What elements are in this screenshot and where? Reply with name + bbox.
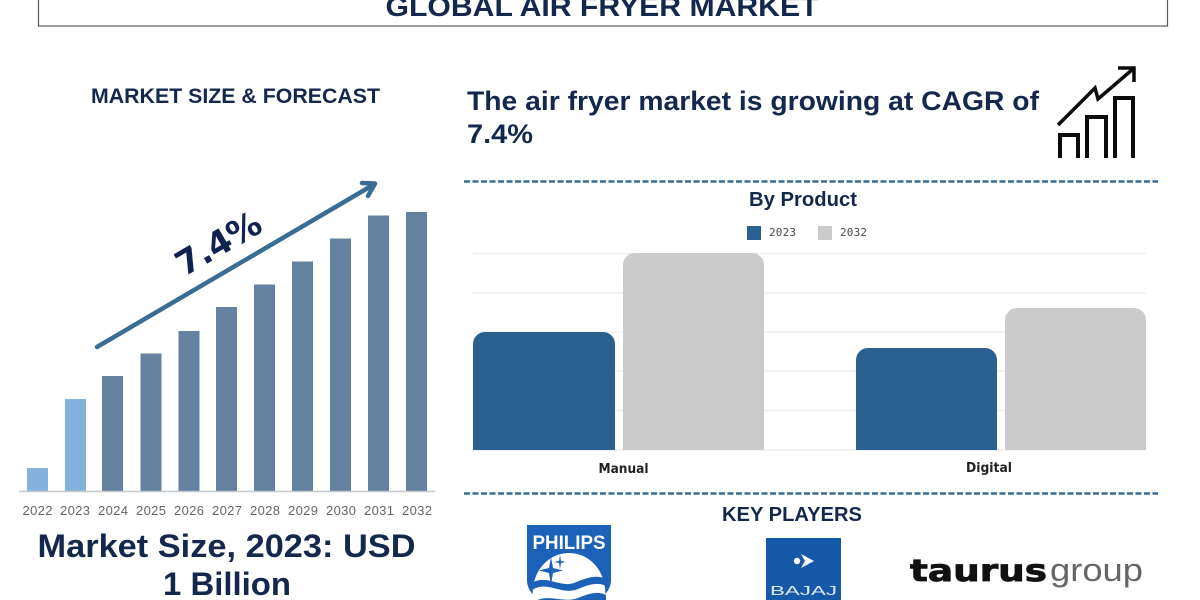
heading: key players: KEY PLAYERS <box>722 504 862 526</box>
header banner <box>38 0 1168 26</box>
bar chart: market forecast 2022-2032 <box>19 212 435 518</box>
divider: upper <box>464 180 1158 183</box>
growth arrow <box>97 183 375 347</box>
market size callout: Market Size, 2023: USD <box>38 528 416 564</box>
icon: growth chart <box>1058 68 1134 158</box>
year labels: 2026 <box>174 503 204 518</box>
heading: market size and forecast: MARKET SIZE & FORECAST <box>91 85 380 108</box>
year labels: 2032 <box>402 503 432 518</box>
logo: Bajaj: BAJAJ <box>770 583 837 598</box>
category labels: Digital <box>966 461 1012 476</box>
growth rate label: 7.4% <box>168 204 269 285</box>
logo: Philips: PHILIPS <box>532 533 606 554</box>
year labels: 2029 <box>288 503 318 518</box>
logo: Bajaj <box>766 538 841 600</box>
market size callout <box>38 528 416 600</box>
year labels: 2022 <box>22 503 52 518</box>
year labels: 2030 <box>326 503 356 518</box>
CAGR statement <box>467 86 1040 149</box>
year labels: 2027 <box>212 503 242 518</box>
legend: 2023 <box>769 226 796 239</box>
legend: 2032 <box>840 226 867 239</box>
CAGR statement: 7.4% <box>467 119 533 149</box>
year labels: 2024 <box>98 503 128 518</box>
year labels: 2028 <box>250 503 280 518</box>
category labels: Manual <box>598 462 648 477</box>
CAGR statement: The air fryer market is growing at CAGR of <box>467 86 1040 116</box>
legend <box>747 226 867 240</box>
logo: Taurus group: group <box>1050 552 1143 588</box>
heading: by product: By Product <box>749 189 857 211</box>
logo: Taurus group: taurus <box>910 554 1047 589</box>
logo: Philips <box>527 525 611 600</box>
year labels: 2031 <box>364 503 394 518</box>
year labels: 2023 <box>60 503 90 518</box>
year labels <box>22 503 432 518</box>
logo: Taurus group <box>910 552 1143 589</box>
bar chart: by product <box>473 253 1146 477</box>
divider: lower <box>464 492 1158 495</box>
category labels <box>598 461 1012 477</box>
year labels: 2025 <box>136 503 166 518</box>
